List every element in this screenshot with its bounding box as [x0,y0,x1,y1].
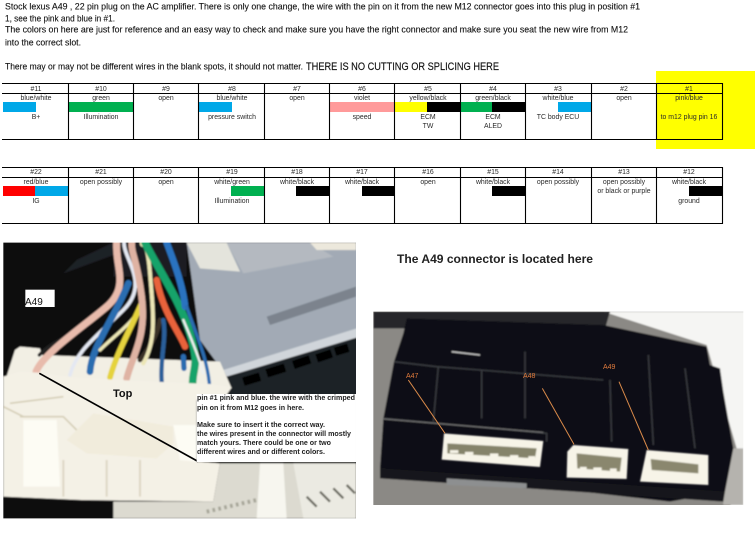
pin table: bottom row pins 22 to 12: #14 [552,169,564,176]
pin table: bottom row pins 22 to 12: #22 [30,169,42,176]
pin table: top row pins 11 to 1: green [92,95,110,102]
pin table: top row pins 11 to 1: white/blue [541,95,574,102]
callout leader line [39,373,198,462]
pin table: bottom row pins 22 to 12: open [158,179,174,186]
note on pin 1: different wires and or different colors. [197,447,325,456]
pin table: top row pins 11 to 1: #7 [293,86,301,93]
pin table: bottom row pins 22 to 12: ground [678,198,700,205]
pin table: top row pins 11 to 1: yellow/black [409,95,447,102]
connector rear shelf [3,347,232,388]
note on pin 1: pin #1 pink and blue. the wire with the crimped [197,393,355,402]
pin table: top row pins 11 to 1: #8 [228,86,236,93]
label: Top: Top [113,388,133,400]
pin table: top row pins 11 to 1: open [616,95,632,102]
photo: amplifier module with A47 A48 A49 connectors [370,305,747,512]
label: A49: A49 [603,364,616,371]
pin table: bottom row pins 22 to 12: white/black [671,179,707,186]
pin table: top row pins 11 to 1: open [289,95,305,102]
intro text block: The colors on here are just for reference and an easy way to check and make sure you have the right connector and make sure you seat the new wire from M12 [5,24,628,36]
intro text block [5,2,640,73]
intro text block: Stock lexus A49 , 22 pin plug on the AC amplifier. There is only one change, the wire with the pin on it from the new M12 connector goes into this plug in position #1 [5,2,640,12]
pin table: top row pins 11 to 1: #2 [620,86,628,93]
pin table: top row pins 11 to 1: green/black [475,95,511,102]
pin table: bottom row pins 22 to 12: Illumination [215,198,250,205]
note on pin 1: match yours. There could be one or two [197,438,332,447]
pin table: bottom row pins 22 to 12: #21 [95,169,107,176]
pin table: bottom row pins 22 to 12: #16 [422,169,434,176]
label: A49: A49 [25,297,43,308]
pin table: bottom row pins 22 to 12: #20 [160,169,172,176]
pin table: top row pins 11 to 1: speed [353,114,372,121]
pin table: top row pins 11 to 1: to m12 plug pin 16 [661,114,718,121]
note on pin 1 [197,393,355,456]
lower right clip [113,463,356,518]
pin table: bottom row pins 22 to 12: #15 [487,169,499,176]
pin table: top row pins 11 to 1: #10 [95,86,107,93]
pin table: bottom row pins 22 to 12: open possibly [603,179,646,186]
pin table: bottom row pins 22 to 12: #13 [618,169,630,176]
pin table: top row pins 11 to 1: #9 [162,86,170,93]
intro text block: into the correct slot. [5,38,81,48]
pin table: bottom row pins 22 to 12: white/black [279,179,315,186]
highlight: pin 1 yellow box [656,71,755,149]
pin table: top row pins 11 to 1: ECM [420,114,436,121]
pin table: top row pins 11 to 1: blue/white [20,95,52,102]
pin table: bottom row pins 22 to 12: #19 [226,169,238,176]
pin table: top row pins 11 to 1: #11 [30,86,42,93]
pin table: top row pins 11 to 1: #3 [554,86,562,93]
pin table: top row pins 11 to 1: #6 [358,86,366,93]
pin table: bottom row pins 22 to 12: IG [32,198,40,205]
note on pin 1: pin on it from M12 goes in here. [197,403,304,412]
note on pin 1: the wires present in the connector will mostly [197,429,351,438]
heading: connector location: The A49 connector is located here [397,252,593,266]
pin table: top row pins 11 to 1: TC body ECU [537,114,579,121]
pin table: top row pins 11 to 1: violet [354,95,370,102]
leader lines [408,380,648,450]
pin table: top row pins 11 to 1: ALED [484,123,502,130]
pin table: top row pins 11 to 1: open [158,95,174,102]
pin table: top row pins 11 to 1: Illumination [84,114,119,121]
label background [25,290,55,307]
pin table: top row pins 11 to 1: B+ [32,114,40,121]
pin table: top row pins 11 to 1: #5 [424,86,432,93]
pin table: bottom row pins 22 to 12: white/black [475,179,511,186]
pin table: bottom row pins 22 to 12 [2,167,723,224]
pin table: bottom row pins 22 to 12: white/black [344,179,380,186]
label: A47: A47 [406,373,419,380]
pin table: top row pins 11 to 1: pressure switch [208,114,256,121]
pin table: bottom row pins 22 to 12: #17 [356,169,368,176]
pin table: bottom row pins 22 to 12: red/blue [24,179,49,186]
pin table: top row pins 11 to 1: pink/blue [675,95,703,102]
pin table: bottom row pins 22 to 12: #12 [683,169,695,176]
note background [197,394,356,462]
wires [36,243,209,383]
intro text block: There may or may not be different wires in the blank spots, it should not matter. [5,62,303,72]
pin table: top row pins 11 to 1: ECM [485,114,501,121]
pin table: bottom row pins 22 to 12: or black or purple [597,188,651,195]
pin table: bottom row pins 22 to 12: open possibly [80,179,123,186]
pin table: top row pins 11 to 1 [2,83,723,140]
note on pin 1: Make sure to insert it the correct way. [197,420,325,429]
intro text block: 1, see the pink and blue in #1. [5,14,115,24]
connector body [3,372,232,502]
pin table: top row pins 11 to 1: blue/white [216,95,248,102]
intro text block: THERE IS NO CUTTING OR SPLICING HERE [306,61,499,73]
photo: A49 connector with wires [0,240,367,523]
connectors [442,433,543,467]
label: A48: A48 [523,373,536,380]
pin table: top row pins 11 to 1: TW [423,123,434,130]
pin table: bottom row pins 22 to 12: #18 [291,169,303,176]
pin table: bottom row pins 22 to 12: open possibly [537,179,580,186]
pin table: bottom row pins 22 to 12: white/green [213,179,250,186]
pin table: bottom row pins 22 to 12: open [420,179,436,186]
pin table: top row pins 11 to 1: #1 [685,86,693,93]
pin table: top row pins 11 to 1: #4 [489,86,497,93]
